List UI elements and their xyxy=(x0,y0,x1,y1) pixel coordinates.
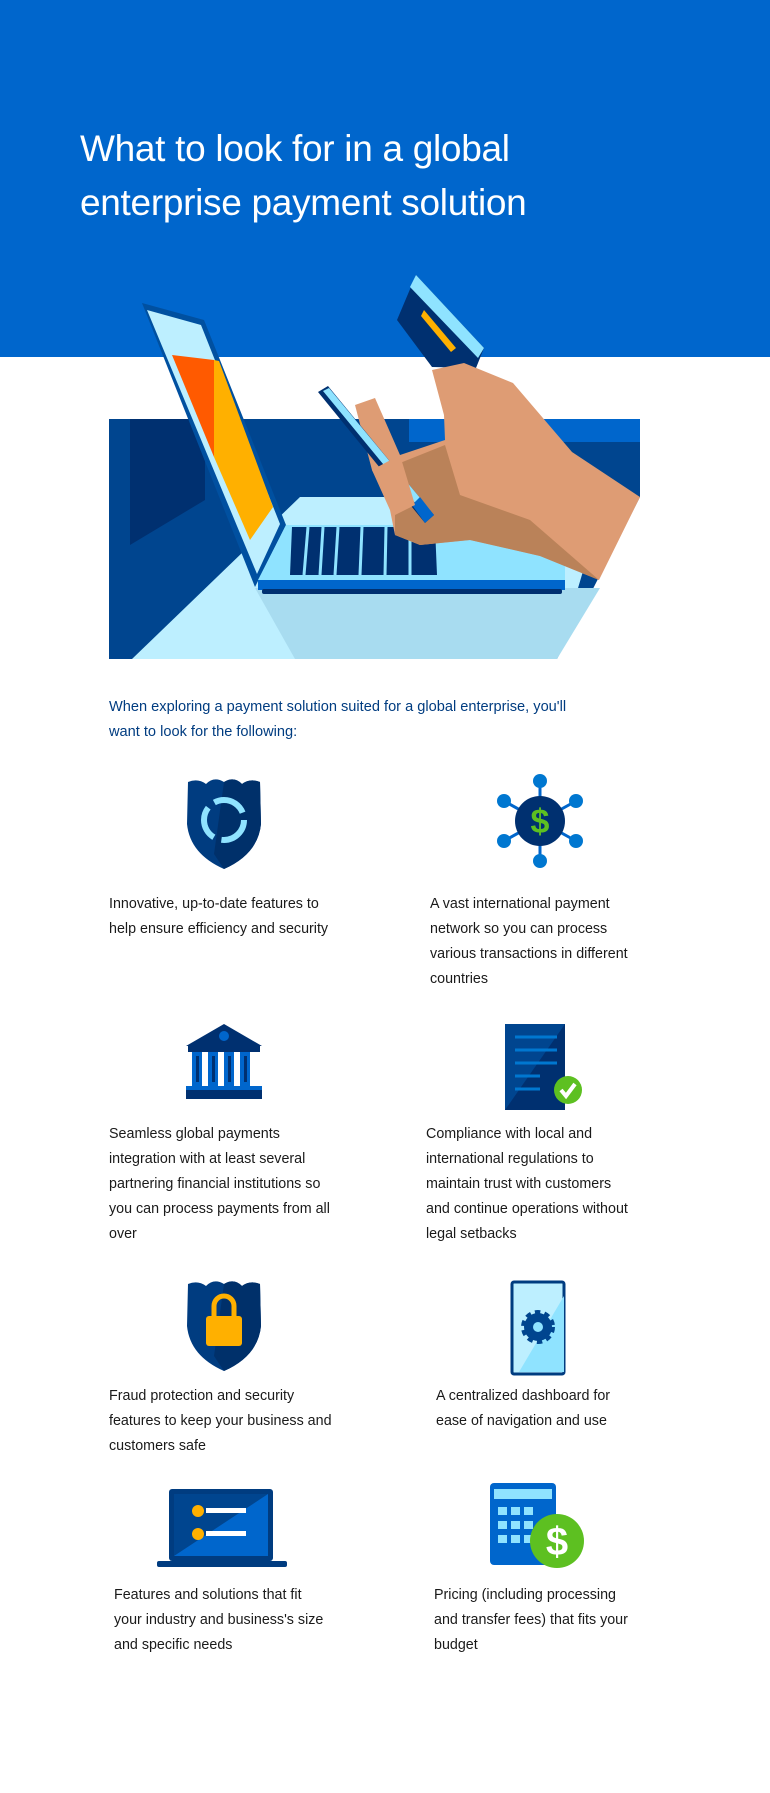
text: compliance: legal setbacks xyxy=(426,1226,517,1242)
icon: payment network: $ xyxy=(531,803,550,841)
title: enterprise payment solution xyxy=(80,182,526,223)
text: solutions fit xyxy=(114,1587,323,1653)
text: compliance: and continue operations without xyxy=(426,1201,628,1217)
text: integration: integration with at least several xyxy=(109,1151,305,1167)
icon: shield refresh xyxy=(187,779,261,869)
text: features xyxy=(109,896,328,937)
text: features: Innovative, up-to-date features to xyxy=(109,896,319,912)
title xyxy=(80,128,526,223)
title: What to look for in a global xyxy=(80,128,510,169)
text: integration: partnering financial institutions so xyxy=(109,1176,320,1192)
card xyxy=(397,275,484,368)
phone xyxy=(318,386,434,523)
icon: laptop list xyxy=(157,1489,287,1567)
text: solutions fit: your industry and business's size xyxy=(114,1612,323,1628)
text: pricing: Pricing (including processing xyxy=(434,1587,616,1603)
text: compliance: Compliance with local and xyxy=(426,1126,592,1142)
text: pricing: and transfer fees) that fits your xyxy=(434,1612,628,1628)
text: dashboard: A centralized dashboard for xyxy=(436,1388,610,1404)
text: dashboard xyxy=(436,1388,610,1429)
text: fraud: customers safe xyxy=(109,1438,206,1454)
text: network: various transactions in different xyxy=(430,946,628,962)
hero illustration: laptop, phone, hand with card xyxy=(109,275,640,659)
text: compliance xyxy=(426,1126,628,1242)
text: solutions fit: Features and solutions that fit xyxy=(114,1587,302,1603)
laptop lid xyxy=(142,303,286,587)
text: pricing: budget xyxy=(434,1637,478,1653)
text: fraud: Fraud protection and security xyxy=(109,1388,294,1404)
text: fraud: features to keep your business and xyxy=(109,1413,332,1429)
text: network: network so you can process xyxy=(430,921,607,937)
text: network: countries xyxy=(430,971,488,987)
icon: dashboard tablet xyxy=(510,1280,566,1376)
icon: calculator dollar xyxy=(490,1483,584,1568)
text: integration: Seamless global payments xyxy=(109,1126,280,1142)
text: integration: you can process payments from all xyxy=(109,1201,330,1217)
text: dashboard: ease of navigation and use xyxy=(436,1413,607,1429)
hand xyxy=(355,363,640,580)
text: compliance: international regulations to xyxy=(426,1151,594,1167)
intro text: want to look for the following: xyxy=(109,724,297,740)
intro text: When exploring a payment solution suited for a global enterprise, you'll xyxy=(109,699,566,715)
text: compliance: maintain trust with customers xyxy=(426,1176,611,1192)
intro text xyxy=(109,699,566,740)
text: network: A vast international payment xyxy=(430,896,610,912)
text: features: help ensure efficiency and security xyxy=(109,921,328,937)
text: network xyxy=(430,896,628,987)
text: solutions fit: and specific needs xyxy=(114,1637,232,1653)
text: pricing xyxy=(434,1587,628,1653)
text: integration xyxy=(109,1126,330,1242)
icon: calculator dollar: $ xyxy=(546,1520,568,1564)
laptop base xyxy=(258,525,565,580)
text: integration: over xyxy=(109,1226,137,1242)
icon: shield lock xyxy=(187,1281,261,1371)
icon: bank xyxy=(186,1024,262,1099)
text: fraud xyxy=(109,1388,332,1454)
icon: payment network xyxy=(497,774,583,868)
header band xyxy=(0,0,770,357)
icon: compliance document xyxy=(505,1024,582,1110)
